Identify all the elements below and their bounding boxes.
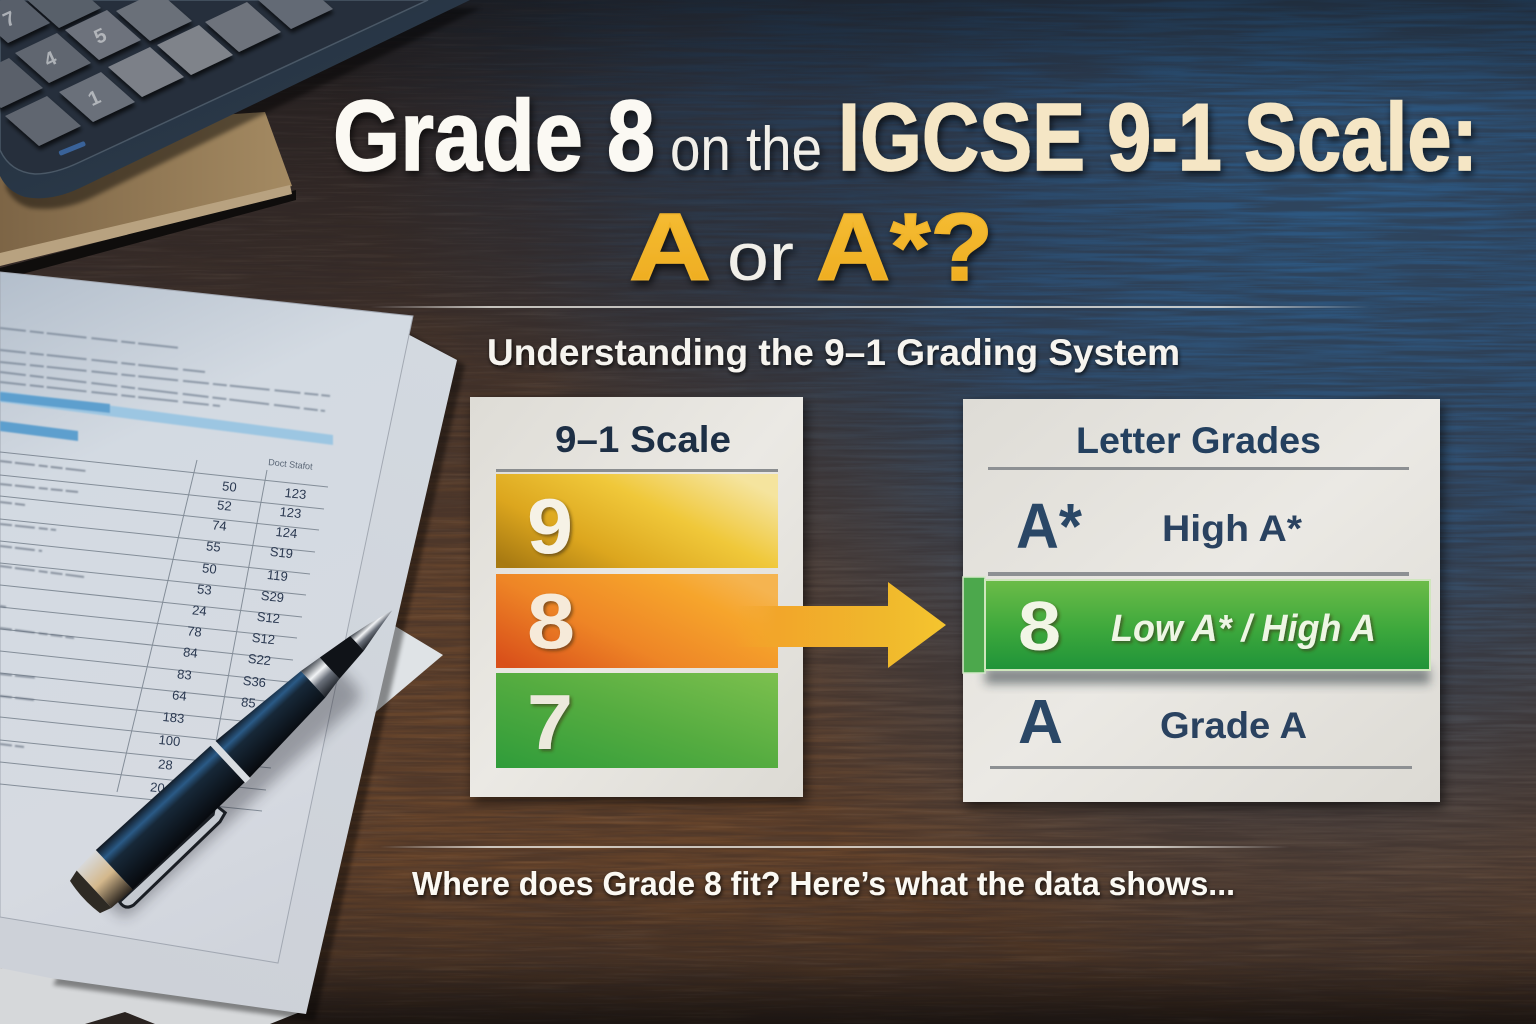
title: line 1: Grade 8 <box>333 80 655 192</box>
title: line 2: or <box>727 219 794 295</box>
panel: letter grades <box>963 399 1440 802</box>
highlighted row: grade 8 <box>963 577 1430 673</box>
table numbers: S29 <box>260 588 285 605</box>
table row labels <box>0 461 86 747</box>
closing question: Where does Grade 8 fit? Here’s what the data shows... <box>412 865 1235 902</box>
bar: grade 8: 8 <box>527 577 575 665</box>
row: A <box>1018 688 1307 757</box>
bar: grade 9: 9 <box>527 482 573 570</box>
bar: grade 8 <box>496 574 778 668</box>
table numbers: 85 <box>240 694 256 711</box>
calculator keys: 7 <box>0 7 19 32</box>
bar: grade 7 <box>496 673 778 768</box>
title: line 1 <box>333 80 1478 192</box>
table numbers: 28 <box>157 756 173 773</box>
calculator keys: 5 <box>91 24 110 49</box>
table numbers: S36 <box>242 673 267 690</box>
paper stack with data table <box>0 272 465 1024</box>
notebook under calculator <box>0 112 296 280</box>
table grid <box>0 452 328 811</box>
calculator keys: 1 <box>85 86 104 111</box>
table numbers: 24 <box>191 602 207 619</box>
calculator keys <box>0 0 333 146</box>
table numbers: 124 <box>275 524 298 541</box>
bar: grade 9 <box>496 474 778 570</box>
table numbers <box>149 478 307 796</box>
table numbers: 50 <box>201 560 217 577</box>
table numbers: S12 <box>251 630 276 647</box>
table numbers: 53 <box>196 581 212 598</box>
title: line 2: A*? <box>816 194 993 301</box>
table numbers: 55 <box>205 538 221 555</box>
pen <box>65 591 422 931</box>
row: A: A <box>1018 688 1063 757</box>
row: A*: A* <box>1016 490 1082 562</box>
table numbers: 84 <box>182 644 198 661</box>
table numbers: 123 <box>284 485 307 502</box>
table numbers: 83 <box>176 666 192 683</box>
panel: 9-1 scale <box>470 397 803 797</box>
row: A: Grade A <box>1160 705 1307 746</box>
table numbers: S22 <box>247 651 272 668</box>
panel heading: 9-1 Scale: 9–1 Scale <box>555 419 731 460</box>
row: A*: High A* <box>1162 508 1303 549</box>
bar: grade 7: 7 <box>527 678 573 766</box>
table numbers: S12 <box>256 609 281 626</box>
table numbers: 52 <box>216 497 232 514</box>
table numbers: 78 <box>186 623 202 640</box>
table numbers: S19 <box>269 544 294 561</box>
title: line 1: on the <box>670 115 822 184</box>
highlighted row: grade 8: Low A* / High A <box>1111 608 1376 650</box>
table numbers: 74 <box>211 517 227 534</box>
table numbers: 119 <box>266 567 289 584</box>
table numbers: 64 <box>171 687 187 704</box>
row: A* <box>1016 490 1303 562</box>
highlighted row: grade 8: 8 <box>1018 587 1061 665</box>
title: line 2: A <box>629 194 711 301</box>
table numbers: 20 <box>149 779 165 796</box>
table numbers: 123 <box>279 504 302 521</box>
title: line 2 <box>629 194 993 301</box>
table numbers: 50 <box>221 478 237 495</box>
paper stack with data table: Doct Stafot <box>268 457 314 472</box>
calculator <box>0 0 481 209</box>
subtitle: Understanding the 9–1 Grading System <box>487 332 1180 373</box>
paper header text lines <box>0 328 330 411</box>
pen clip <box>115 803 229 911</box>
arrow: grade 8 to letter grades <box>735 582 946 668</box>
calculator keys: 4 <box>41 47 61 72</box>
table numbers: 183 <box>162 709 185 726</box>
table numbers: 100 <box>158 732 181 749</box>
panel heading: Letter Grades: Letter Grades <box>1076 420 1321 461</box>
blue table header band <box>0 391 333 445</box>
